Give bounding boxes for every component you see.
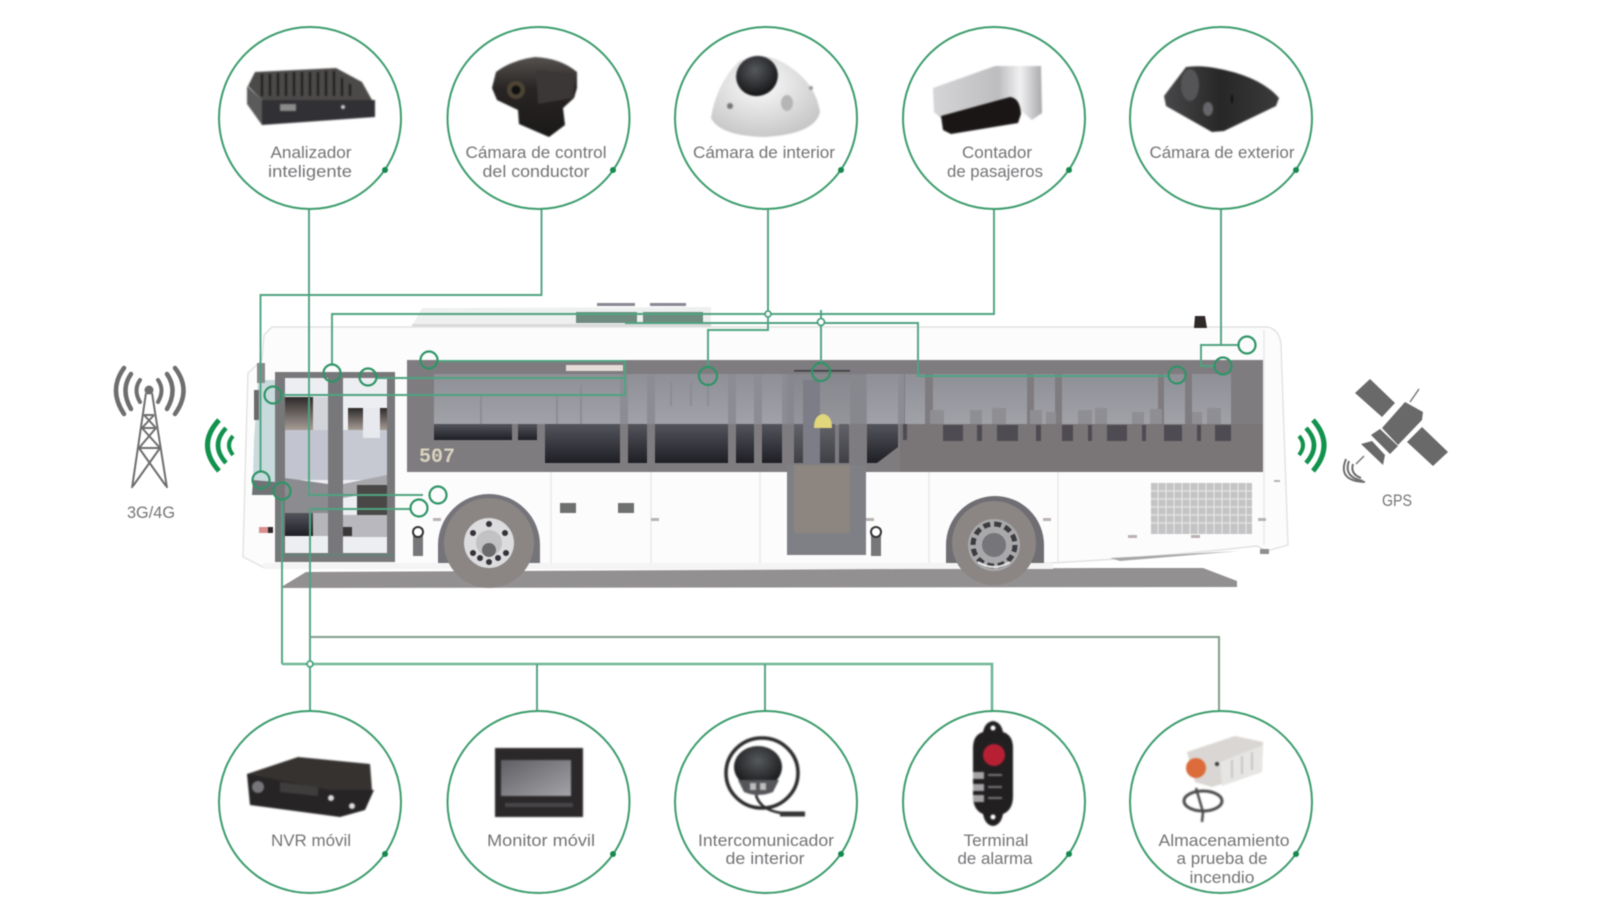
fuel caps [413, 527, 881, 556]
door sticker [814, 414, 832, 428]
label: incendio [1190, 868, 1254, 887]
icon: dome camera [711, 50, 820, 137]
rear wheel [946, 496, 1044, 585]
icon: 3G/4G tower [116, 368, 184, 488]
icon: left signal waves [208, 420, 233, 471]
label: Cámara de exterior [1150, 143, 1295, 162]
panel: camara de control del conductor [448, 27, 630, 209]
label: GPS: GPS [1382, 491, 1412, 510]
front door [275, 372, 395, 562]
label: Terminal [964, 831, 1028, 850]
label: Almacenamiento [1158, 831, 1290, 850]
windshield [253, 380, 275, 482]
icon: alarm terminal [973, 721, 1013, 826]
junctions [307, 311, 824, 667]
icon: intercom [726, 738, 805, 814]
rear engine grille [1151, 483, 1252, 534]
panel seams [551, 330, 1264, 563]
panel: analizador inteligente [219, 27, 401, 209]
dark lower windows [434, 424, 898, 463]
panel: almacenamiento a prueba de incendio [1130, 711, 1312, 893]
window band [407, 360, 1263, 472]
label: de pasajeros [947, 162, 1043, 181]
icon: driver camera [492, 57, 577, 137]
label: de interior [726, 849, 805, 868]
icon: right signal waves [1299, 420, 1324, 471]
front wheel [438, 494, 540, 588]
panel: terminal de alarma [903, 711, 1085, 893]
label: Analizador [270, 143, 352, 162]
icon: analyzer box [247, 68, 375, 125]
label: Cámara de interior [693, 143, 835, 162]
panel: intercomunicador de interior [675, 711, 857, 893]
label: Intercomunicador [698, 831, 834, 850]
body markers [433, 480, 1280, 538]
icon: exterior camera [1164, 66, 1279, 132]
roof air conditioning [412, 303, 711, 328]
icon: fireproof storage [1184, 736, 1263, 822]
rear door [787, 366, 866, 555]
label: 3G/4G: 3G/4G [127, 503, 175, 522]
rear foot [1260, 549, 1269, 554]
fleet number: 507 [419, 446, 455, 469]
vents [560, 503, 634, 513]
interior bars [480, 382, 709, 424]
label: Contador [962, 143, 1032, 162]
icon: nvr [247, 757, 374, 817]
seat backs [930, 408, 1221, 424]
destination strip [566, 365, 623, 371]
bus [243, 303, 1288, 588]
headlight [259, 527, 273, 533]
label: de alarma [958, 849, 1033, 868]
bus body [243, 327, 1288, 567]
wiring [252, 209, 1256, 711]
label: a prueba de [1176, 849, 1268, 868]
seats silhouettes [903, 424, 1231, 441]
label: inteligente [268, 162, 352, 181]
label: Monitor móvil [487, 831, 595, 850]
panel: nvr movil [219, 711, 401, 893]
upper windows [434, 374, 1231, 425]
icon: monitor [495, 748, 583, 817]
panel: contador de pasajeros [903, 27, 1085, 209]
rear mirror [1194, 316, 1207, 328]
ground shadow [283, 568, 1237, 588]
label: del conductor [482, 162, 590, 181]
label: Cámara de control [466, 143, 606, 162]
icon: GPS satellite [1344, 379, 1448, 482]
panel: camara de interior [675, 27, 857, 209]
label: NVR móvil [271, 831, 351, 850]
panel: camara de exterior [1130, 27, 1312, 209]
connection nodes [252, 336, 1256, 516]
icon: passenger counter [933, 66, 1042, 134]
panel: monitor movil [448, 711, 630, 893]
